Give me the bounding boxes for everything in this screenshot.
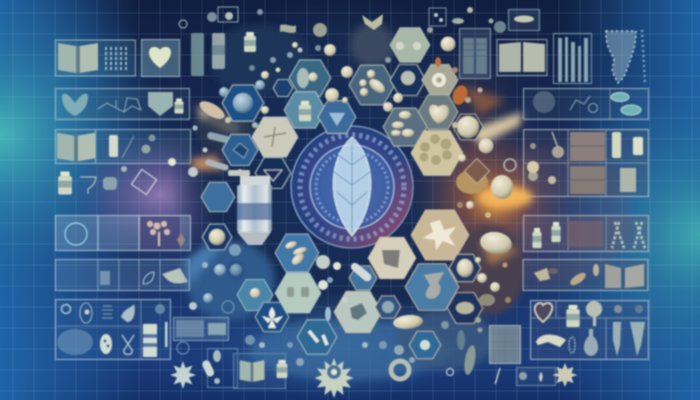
panel: right book	[497, 40, 547, 76]
icon: glowing leaf	[333, 137, 371, 236]
icon: hexagon cluster top left	[201, 60, 356, 250]
icons: left burst tubes	[169, 87, 250, 177]
icons: unframed row	[58, 158, 176, 195]
icon: hexagon cluster bottom right	[334, 210, 483, 359]
panel: right chain row	[524, 88, 648, 120]
icon: central dial	[290, 125, 414, 249]
panel: right double row	[524, 130, 648, 196]
panel: right bottom icons	[530, 300, 648, 360]
streaks: left burst	[185, 105, 255, 285]
chart: right bars	[554, 34, 592, 84]
panel: lower table	[490, 326, 520, 364]
icon: gear star left	[170, 361, 196, 389]
icon: top right dish	[429, 7, 540, 33]
panel: butterfly and molecules	[56, 88, 190, 120]
panel: right book row	[523, 260, 648, 290]
icon: central bottle	[237, 176, 272, 245]
icons: top-left bottles	[179, 7, 263, 76]
panel: bottom-left icon grid	[56, 300, 170, 360]
collage backdrop: dark texture patches	[185, 23, 525, 380]
icon: open book bottom	[234, 354, 287, 388]
icon: sun gear bottom	[314, 358, 354, 398]
icon: hexagon cluster bottom left	[237, 234, 337, 354]
panel: small bottom strip	[174, 318, 228, 340]
icon: capsule frame	[177, 342, 238, 388]
panel: right bottles row	[524, 216, 648, 252]
panel: circle and flowers	[56, 216, 190, 250]
chart: right dot cluster	[606, 30, 645, 84]
panel: left book and dot chart	[56, 40, 136, 76]
panel: bars and leaf	[56, 260, 190, 290]
panel: heart	[142, 40, 180, 76]
panel: book and bottle row	[56, 130, 190, 164]
icon: hexagon cluster top right	[349, 28, 483, 176]
icon: scattered pills	[189, 14, 539, 379]
streaks: right burst	[462, 85, 533, 265]
panel: lower right icons	[495, 363, 578, 387]
panel: right table	[460, 28, 490, 78]
